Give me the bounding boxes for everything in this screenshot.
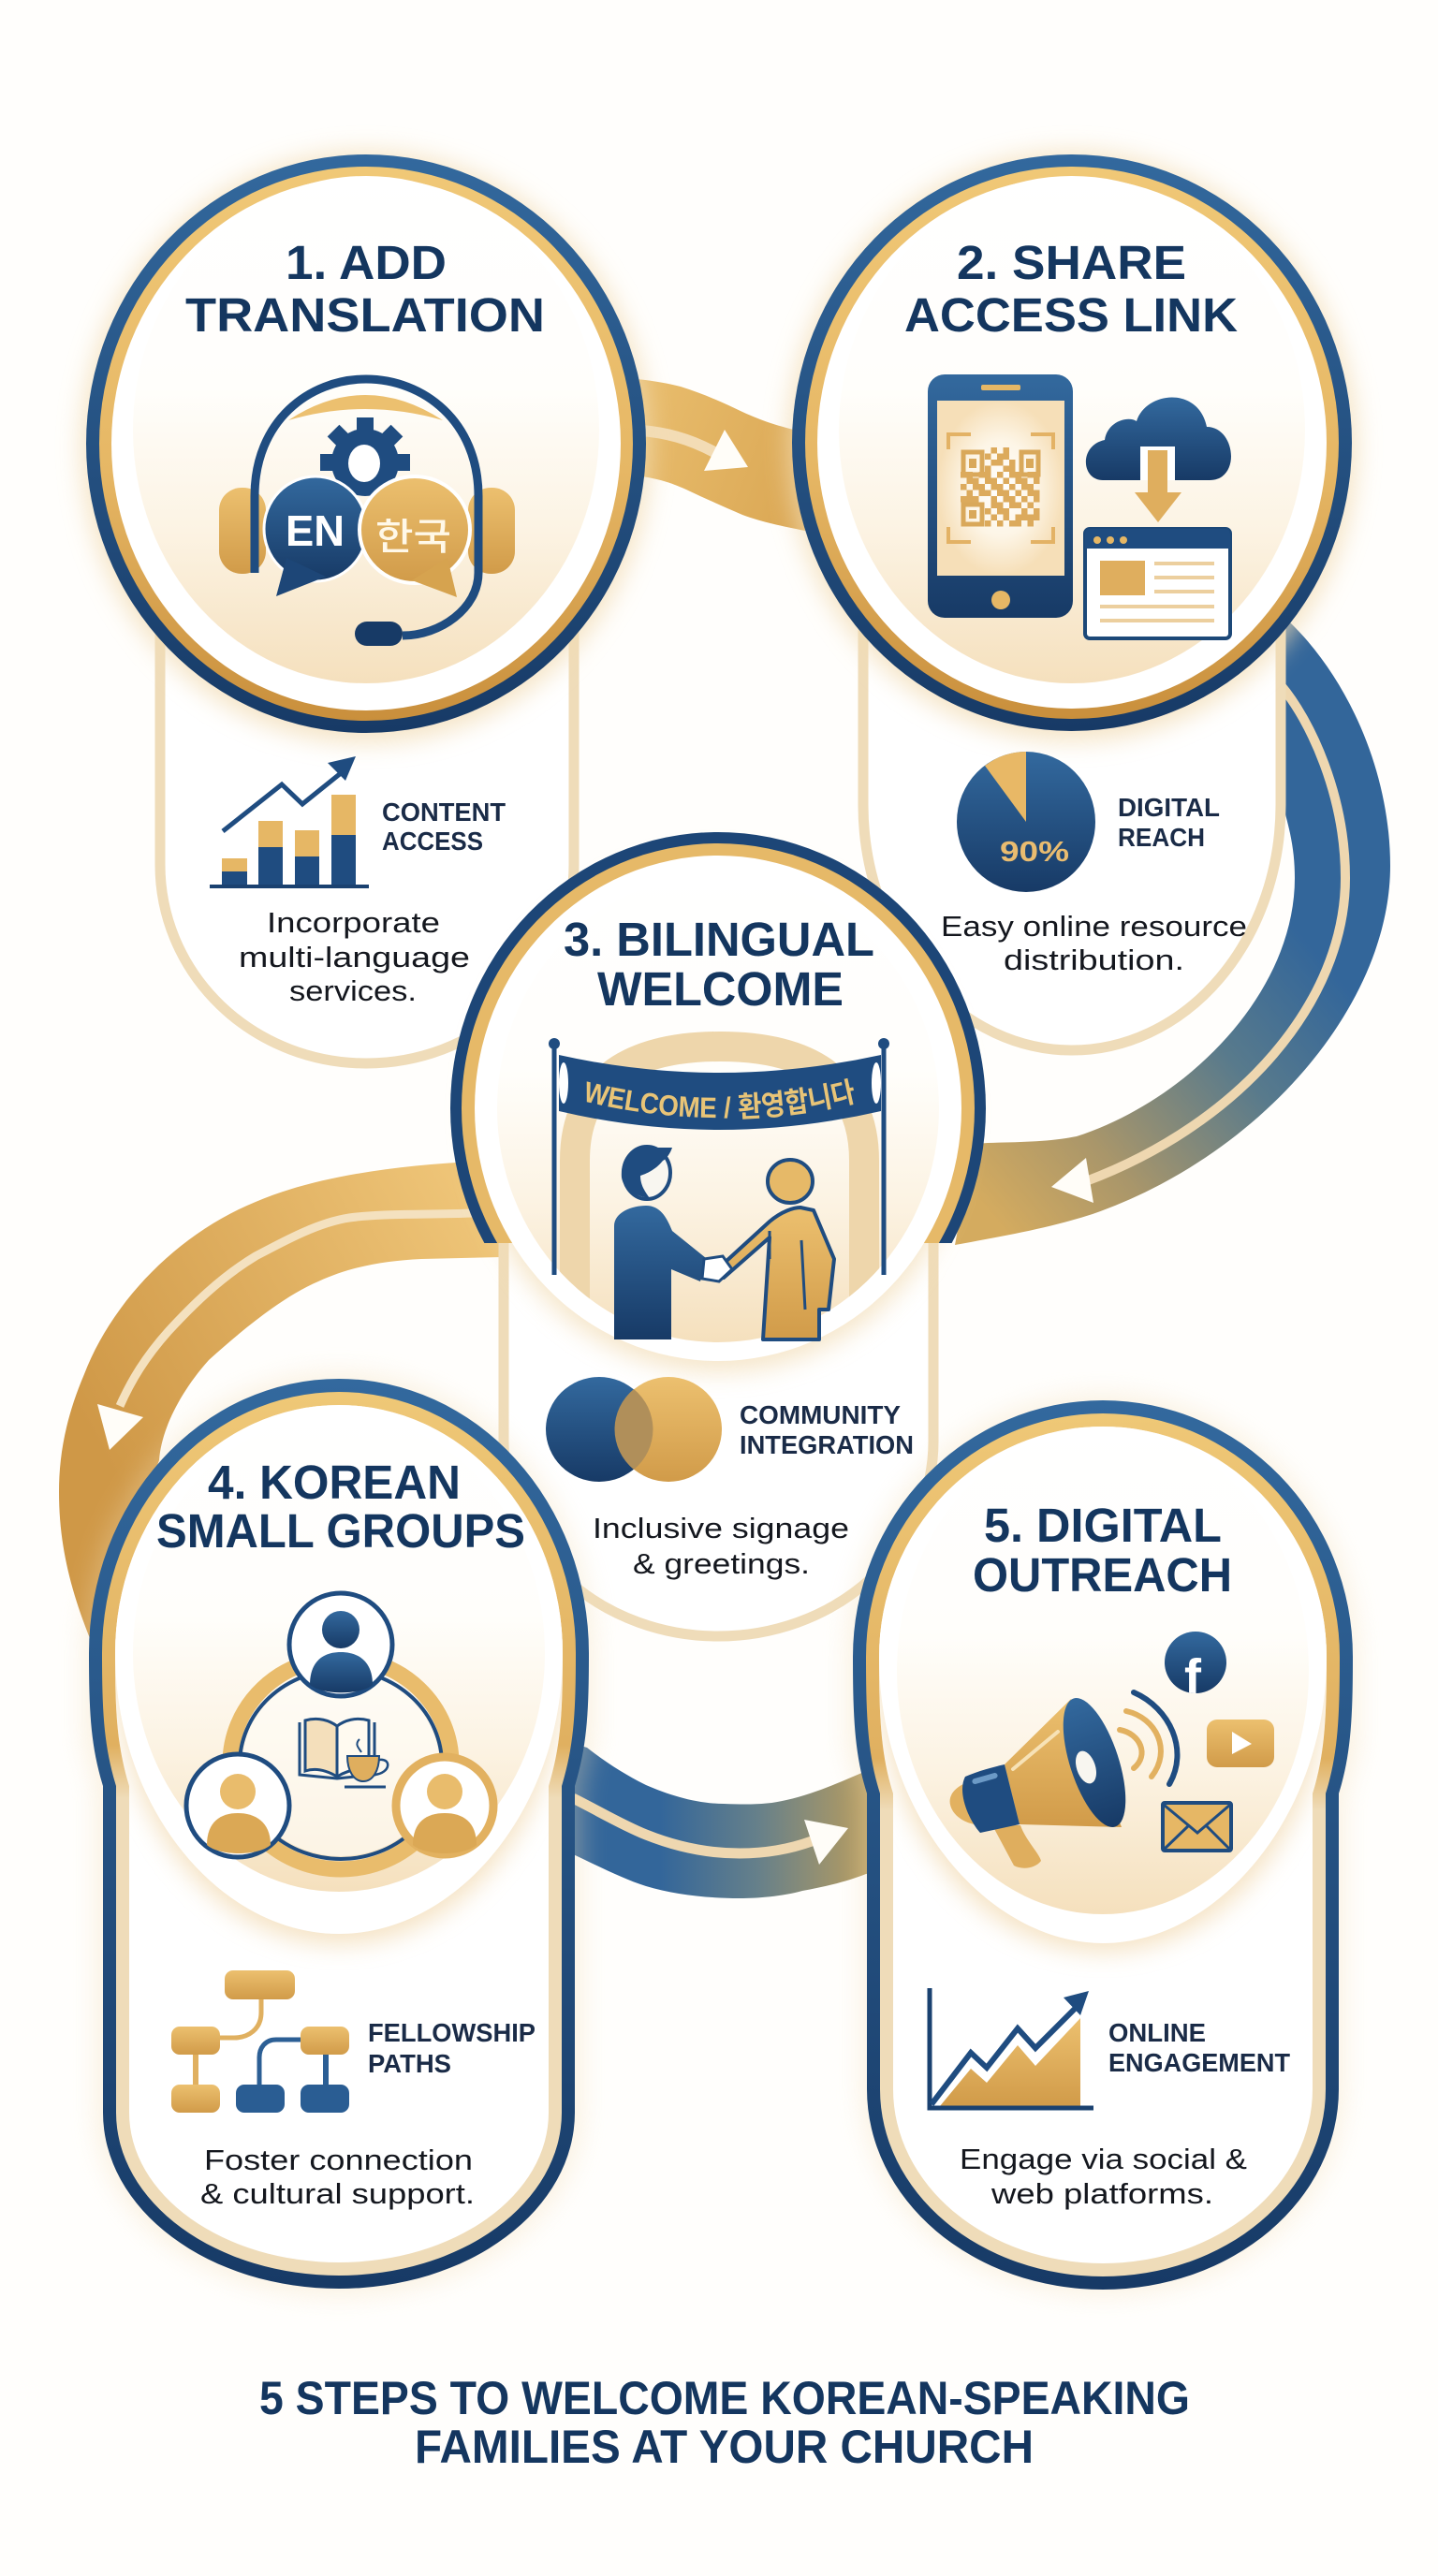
icon: Korean speech bubble bbox=[360, 476, 470, 597]
text: step 1 description: multi-language bbox=[239, 941, 470, 973]
chart: content access bars bbox=[210, 756, 369, 886]
step 5 heading bbox=[973, 1499, 1232, 1602]
text: step 2 description: Easy online resource bbox=[941, 910, 1247, 943]
step 3 heading bbox=[564, 913, 874, 1016]
text: step 4 description: Foster connection bbox=[204, 2144, 473, 2176]
icon: cloud download bbox=[1086, 397, 1231, 522]
icon: video play bbox=[1207, 1720, 1274, 1767]
label: digital reach bbox=[1118, 793, 1220, 852]
label: online engagement bbox=[1108, 2018, 1290, 2077]
chart: online engagement bbox=[930, 1988, 1093, 2108]
text: step 1 description: Incorporate bbox=[267, 906, 440, 939]
icon: small group circle bbox=[186, 1593, 493, 1869]
icon: envelope bbox=[1163, 1803, 1231, 1851]
icon: left person bbox=[186, 1754, 289, 1857]
icon: Korean speech bubble: 한국 bbox=[375, 517, 451, 558]
label: community integration: INTEGRATION bbox=[740, 1430, 914, 1459]
step 1 heading: TRANSLATION bbox=[185, 288, 545, 342]
step 3 lower tail panel bbox=[504, 1236, 933, 1636]
label: fellowship paths bbox=[368, 2018, 536, 2078]
sound waves bbox=[1120, 1692, 1177, 1784]
icon: browser window bbox=[1085, 529, 1230, 638]
text: step 5 description: Engage via social & bbox=[960, 2143, 1247, 2175]
icon: megaphone bbox=[950, 1690, 1177, 1868]
label: digital reach: REACH bbox=[1118, 823, 1205, 852]
label: digital reach: DIGITAL bbox=[1118, 793, 1220, 822]
icon: gear bbox=[320, 417, 410, 496]
text: step 5 description: web platforms. bbox=[990, 2177, 1213, 2210]
icon: right person bbox=[396, 1757, 493, 1854]
text: step 4 description bbox=[200, 2144, 475, 2210]
step 4 heading: SMALL GROUPS bbox=[156, 1504, 525, 1558]
step 2 heading: 2. SHARE bbox=[957, 236, 1186, 289]
panel: step 4 korean small groups bbox=[83, 1372, 594, 2296]
label: community integration: COMMUNITY bbox=[740, 1400, 901, 1429]
step 1 heading: 1. ADD bbox=[286, 236, 447, 289]
step 5 heading: OUTREACH bbox=[973, 1548, 1232, 1602]
arrow: step 1 to step 2 bbox=[637, 379, 805, 531]
label: online engagement: ONLINE bbox=[1108, 2018, 1206, 2047]
step 4 heading bbox=[156, 1456, 525, 1558]
gold person bbox=[724, 1160, 834, 1339]
chart: digital reach pie bbox=[957, 752, 1095, 892]
text: step 1 description bbox=[239, 906, 470, 1007]
step 3 heading: WELCOME bbox=[597, 962, 844, 1016]
arrow: step 2 to step 3 bbox=[955, 618, 1390, 1245]
chart: fellowship paths flow bbox=[171, 1970, 349, 2113]
icon: headset with language bubbles bbox=[219, 379, 515, 646]
chart: digital reach pie: 90% bbox=[1000, 835, 1069, 868]
title: FAMILIES AT YOUR CHURCH bbox=[415, 2421, 1034, 2473]
banner: WELCOME / 환영합니다 bbox=[586, 1078, 854, 1120]
panel: step 5 digital outreach bbox=[847, 1381, 1358, 2295]
banner bbox=[559, 1055, 881, 1130]
step 1 lower tail panel bbox=[160, 599, 574, 1063]
arrow: step 4 to step 5 bbox=[571, 1743, 875, 1898]
label: content access: CONTENT bbox=[382, 798, 506, 827]
label: content access: ACCESS bbox=[382, 827, 483, 856]
handshake bbox=[702, 1256, 732, 1281]
text: step 2 description bbox=[941, 910, 1247, 976]
icon: welcome arch with banner and handshake bbox=[549, 1032, 889, 1341]
label: fellowship paths: FELLOWSHIP bbox=[368, 2018, 536, 2047]
icon: facebook bbox=[1165, 1632, 1226, 1693]
step 3 heading: 3. BILINGUAL bbox=[564, 913, 874, 966]
title: 5 STEPS TO WELCOME KOREAN-SPEAKING bbox=[259, 2372, 1190, 2424]
panel: step 3 bilingual welcome bbox=[450, 832, 986, 1642]
label: online engagement: ENGAGEMENT bbox=[1108, 2048, 1290, 2077]
chart: community integration venn bbox=[546, 1377, 722, 1482]
icon: EN speech bubble: EN bbox=[286, 506, 345, 555]
text: step 3 description: & greetings. bbox=[633, 1547, 810, 1580]
step 2 heading: ACCESS LINK bbox=[904, 288, 1238, 342]
step 2 lower tail panel bbox=[863, 599, 1281, 1050]
arrow: step 3 to step 4 bbox=[59, 1161, 501, 1647]
label: content access bbox=[382, 798, 506, 856]
icon: top person bbox=[289, 1593, 392, 1696]
icon: EN speech bubble bbox=[264, 476, 367, 596]
text: step 3 description bbox=[593, 1512, 849, 1580]
icon: book and coffee bbox=[300, 1719, 388, 1787]
step 2 heading bbox=[904, 236, 1238, 342]
label: community integration bbox=[740, 1400, 914, 1459]
navy person bbox=[614, 1147, 706, 1339]
title bbox=[259, 2372, 1190, 2473]
text: step 1 description: services. bbox=[289, 974, 417, 1007]
text: step 5 description bbox=[960, 2143, 1247, 2210]
icon: facebook: f bbox=[1184, 1649, 1202, 1705]
panel: step 1 add translation bbox=[81, 152, 651, 1063]
icon: phone with QR code bbox=[928, 374, 1073, 618]
step 1 heading bbox=[185, 236, 545, 342]
step 5 heading: 5. DIGITAL bbox=[984, 1499, 1222, 1552]
text: step 4 description: & cultural support. bbox=[200, 2177, 475, 2210]
text: step 3 description: Inclusive signage bbox=[593, 1512, 849, 1544]
label: fellowship paths: PATHS bbox=[368, 2049, 451, 2078]
text: step 2 description: distribution. bbox=[1004, 944, 1184, 976]
panel: step 2 share access link bbox=[787, 152, 1357, 1050]
step 4 heading: 4. KOREAN bbox=[208, 1456, 461, 1509]
